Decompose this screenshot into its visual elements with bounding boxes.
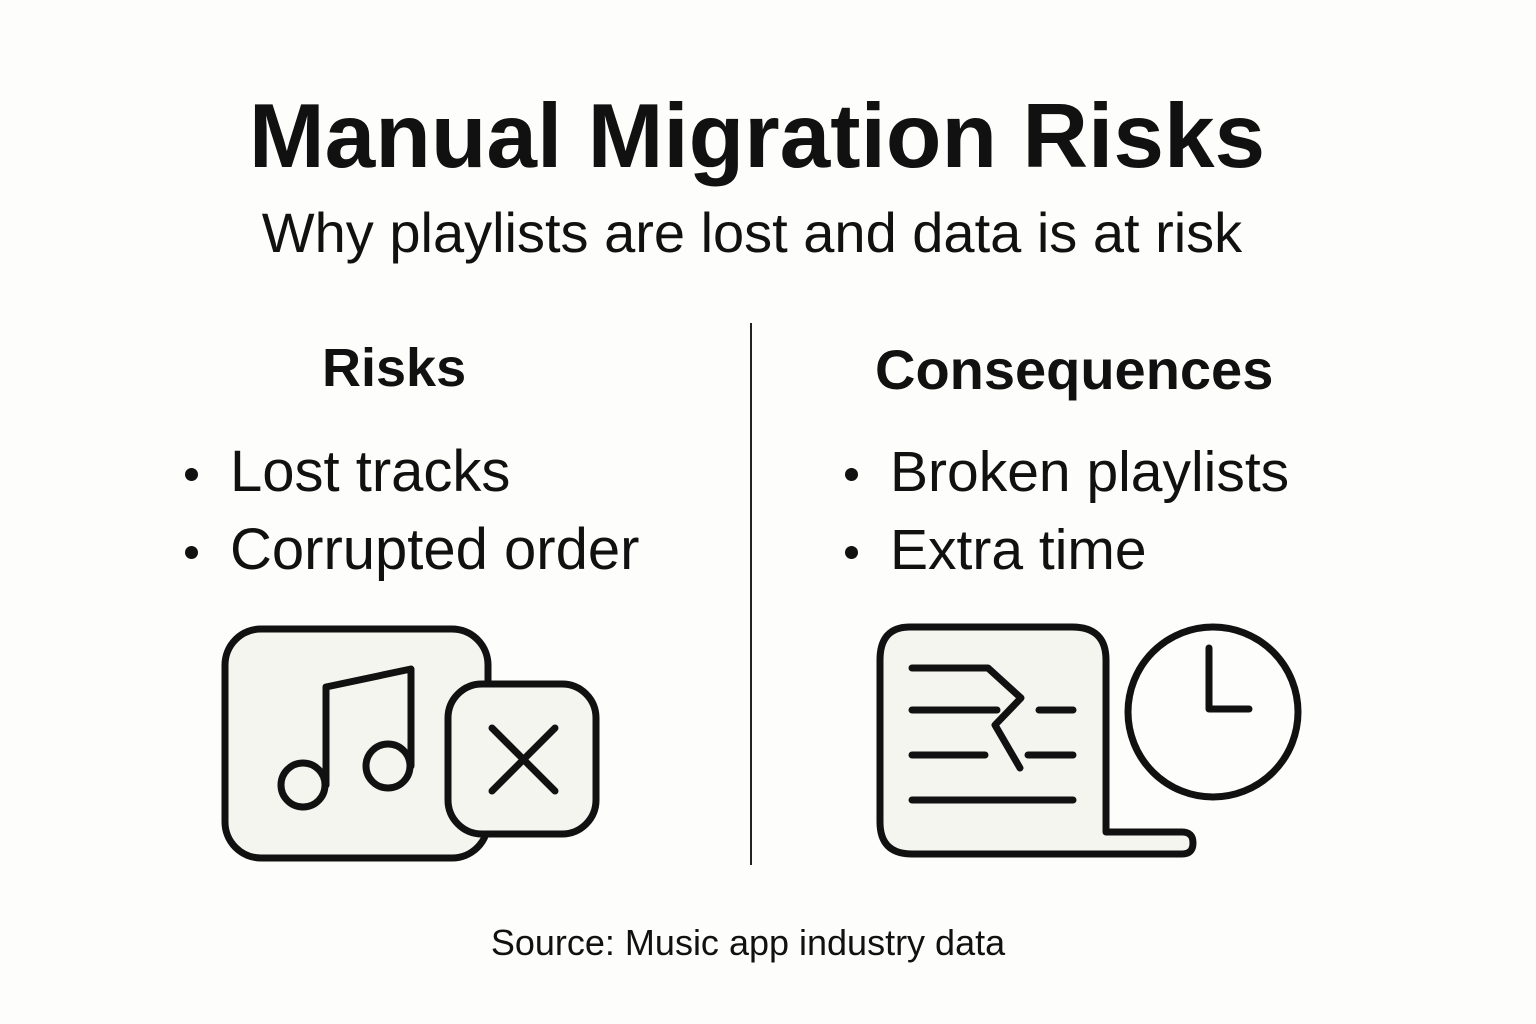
source note: Source: Music app industry data xyxy=(491,922,1005,963)
list: risks: Corrupted order xyxy=(230,517,639,582)
icon: broken playlist and clock xyxy=(880,627,1298,854)
icon: music with x xyxy=(225,629,596,858)
subtitle: Why playlists are lost and data is at risk xyxy=(262,201,1242,264)
list: consequences xyxy=(845,440,1289,582)
divider xyxy=(750,323,752,865)
list: risks xyxy=(185,439,639,582)
heading: risks: Risks xyxy=(322,338,466,398)
title: Manual Migration Risks xyxy=(249,86,1265,187)
heading: consequences: Consequences xyxy=(875,338,1273,401)
list: risks: Lost tracks xyxy=(230,439,510,504)
list: consequences: Extra time xyxy=(890,518,1147,582)
list: consequences: Broken playlists xyxy=(890,440,1289,504)
